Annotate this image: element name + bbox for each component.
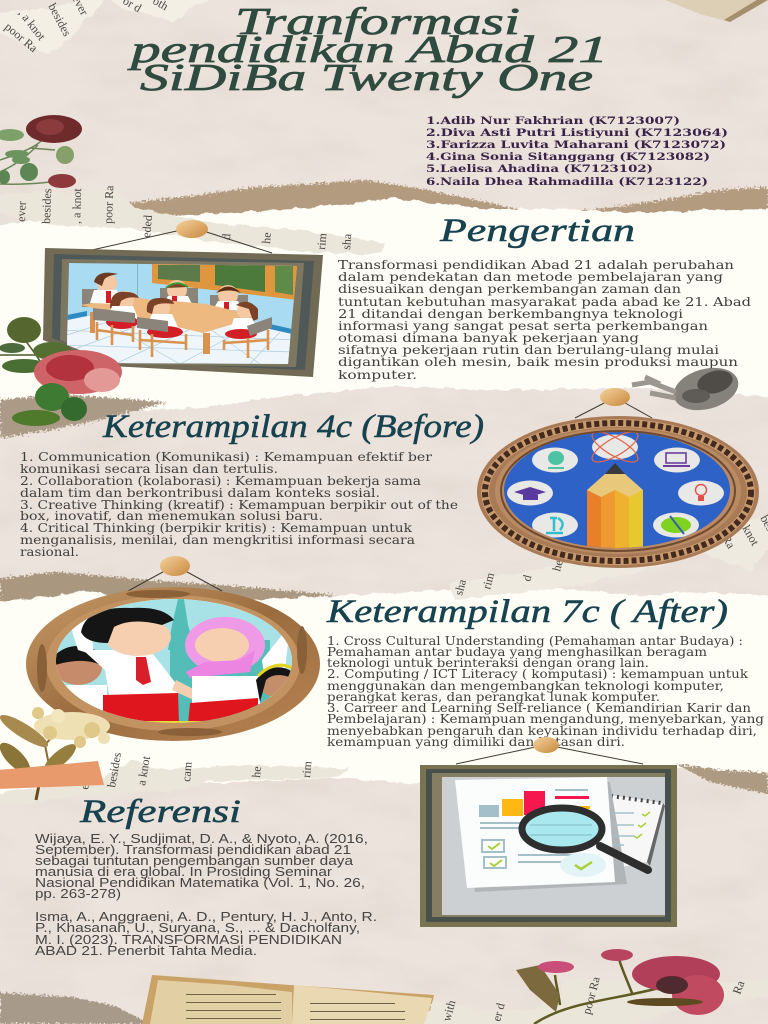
author list: 6.Naila Dhea Rahmadilla (K7123122) bbox=[426, 176, 708, 188]
heading: Keterampilan 4c: Keterampilan 4c (Before) bbox=[102, 409, 484, 445]
newspaper strip: upper: he bbox=[259, 232, 274, 244]
newspaper scrap: top left: besides bbox=[45, 1, 74, 39]
body text: Pengertian: Transformasi pendidikan Abad 21 adalah perubahan bbox=[338, 258, 734, 272]
author list: 3.Farizza Luvita Maharani (K7123072) bbox=[426, 139, 726, 151]
heading: Keterampilan 7c: Keterampilan 7c ( After) bbox=[326, 594, 728, 630]
icon: pink rose with leaves bbox=[0, 317, 122, 426]
newspaper strip: lower left: besides bbox=[104, 751, 124, 789]
body text: Keterampilan 4c: 1. Communication (Komunikasi) : Kemampuan efektif ber bbox=[20, 450, 432, 464]
body text: references bbox=[35, 832, 377, 958]
body text: Pengertian: digantikan oleh mesin, baik mesin produksi maupun bbox=[338, 355, 738, 369]
picture frame: checklist analysis bbox=[420, 765, 677, 927]
newspaper strip: right: Ra bbox=[719, 532, 739, 552]
newspaper scrap: top left: , a knot bbox=[16, 6, 49, 43]
icon: moth bbox=[632, 361, 743, 417]
body text: references: P., Khasanah, U., Suryana, S., ... & Dacholfany, bbox=[35, 921, 360, 935]
body text: references: September). Transformasi pendidikan abad 21 bbox=[35, 843, 351, 857]
body text: Pengertian: komputer. bbox=[338, 368, 417, 382]
newspaper strip: bottom right: with bbox=[439, 999, 458, 1023]
newspaper strip: right: he bbox=[549, 558, 566, 573]
book corner: top right bbox=[660, 0, 768, 22]
body text: Pengertian: disesuaikan dengan perkembangan zaman dan bbox=[338, 282, 681, 296]
heading: Pengertian: Pengertian bbox=[439, 213, 635, 249]
body text: Pengertian: otomasi dimana banyak pekerjaan yang bbox=[338, 331, 640, 345]
newspaper strip: upper: rim bbox=[314, 232, 329, 250]
newspaper strip: upper: d bbox=[219, 233, 234, 240]
body text: references: Nasional Pendidikan Matematika (Vol. 1, No. 26, bbox=[35, 876, 365, 890]
body text: Keterampilan 4c: dalam tim dan berkontribusi dalam konteks sosial. bbox=[20, 486, 380, 500]
icon: pressed pink flowers bbox=[516, 949, 724, 1024]
newspaper strip: lower left bbox=[0, 751, 350, 808]
icon: red rose branch top left bbox=[0, 115, 82, 188]
newspaper strip: upper bbox=[0, 185, 385, 255]
oval frame: education icons bbox=[477, 416, 759, 568]
hanging wires and pin: checklist frame bbox=[456, 737, 643, 764]
newspaper strip: right: rim bbox=[479, 570, 497, 591]
body text: Pengertian bbox=[338, 258, 752, 382]
heading: Referensi: Referensi bbox=[79, 794, 241, 830]
cream section: Pengertian bbox=[0, 198, 768, 412]
title: Tranformasi bbox=[235, 1, 520, 43]
illustration: schoolchildren bbox=[54, 599, 296, 725]
body text: references: Isma, A., Anggraeni, A. D., Pentury, H. J., Anto, R. bbox=[35, 910, 377, 924]
newspaper strip: upper: sha bbox=[339, 232, 354, 250]
body text: Keterampilan 4c: 3. Creative Thinking (kreatif) : Kemampuan berpikir out of the bbox=[20, 498, 458, 512]
newspaper strip: upper: besides bbox=[39, 188, 54, 224]
newspaper strip: upper: ever bbox=[14, 201, 29, 222]
newspaper strip: lower left: rim bbox=[299, 760, 314, 778]
body text: Keterampilan 7c: Pembelajaran) : Kemampuan mengandung, menyebarkan, yang bbox=[327, 712, 765, 726]
author list: 2.Diva Asti Putri Listiyuni (K7123064) bbox=[426, 127, 728, 139]
author list: 4.Gina Sonia Sitanggang (K7123082) bbox=[426, 151, 710, 163]
icon: dried flowers and tape bbox=[0, 707, 110, 800]
body text: Keterampilan 7c bbox=[327, 634, 765, 749]
newspaper strip: bottom right: er d bbox=[489, 1001, 508, 1023]
body text: Pengertian: dalam pendekatan dan metode pembelajaran yang bbox=[338, 270, 724, 284]
newspaper strip: bottom right: Ra bbox=[730, 978, 748, 996]
torn paper band: above 7c section bbox=[0, 572, 338, 604]
newspaper strip: right: d bbox=[519, 573, 534, 583]
newspaper strip: lower left: he bbox=[249, 766, 264, 778]
newspaper strip: lower left: cam bbox=[179, 760, 195, 782]
body text: references: Wijaya, E. Y., Sudjimat, D. A., & Nyoto, A. (2016, bbox=[35, 832, 368, 846]
body text: Keterampilan 4c: komunikasi secara lisan dan tertulis. bbox=[20, 462, 278, 476]
hanging wires and pin: children frame bbox=[128, 556, 222, 591]
body text: Keterampilan 7c: Pemahaman antar budaya yang menghasilkan beragam bbox=[327, 645, 707, 659]
oval frame: children bbox=[26, 587, 320, 741]
newspaper strip: right: knot bbox=[739, 522, 763, 549]
body text: Keterampilan 7c: perangkat keras, dan perangkat lunak komputer. bbox=[327, 690, 660, 704]
torn paper band: bottom left dark bbox=[0, 993, 150, 1024]
title: pendidikan Abad 21 bbox=[126, 29, 608, 71]
illustration: pencil and subject icons bbox=[507, 432, 724, 550]
body text: references: sebagai tuntutan pengembangan sumber daya bbox=[35, 854, 353, 868]
picture frame: classroom bbox=[43, 248, 323, 377]
newspaper strip: upper: eded bbox=[139, 214, 155, 238]
body text: references: manusia di era global. In Prosiding Seminar bbox=[35, 865, 332, 879]
torn paper band: right brown patch bbox=[676, 764, 768, 794]
body text: Keterampilan 4c bbox=[20, 450, 458, 559]
body text: Keterampilan 7c: menggunakan dan mengembangkan teknologi komputer, bbox=[327, 679, 724, 693]
newspaper strip: right bbox=[448, 512, 768, 600]
newspaper strip: lower left: a knot bbox=[134, 754, 153, 787]
body text: Pengertian: informasi yang sangat pesat serta perkembangan bbox=[338, 319, 708, 333]
torn paper band: brown patch left bbox=[0, 394, 167, 438]
body text: Pengertian: sifatnya pekerjaan rutin dan berulang-ulang mulai bbox=[338, 343, 719, 357]
newspaper strip: upper: , a knot bbox=[69, 187, 84, 224]
newspaper strip: upper: poor Ra bbox=[101, 185, 116, 224]
body text: Pengertian: tuntutan kebutuhan masyarakat pada abad ke 21. Abad bbox=[338, 295, 752, 309]
newspaper scrap: top left: poor Ra bbox=[2, 20, 41, 55]
author list: 5.Laelisa Ahadina (K7123102) bbox=[426, 163, 653, 175]
torn paper band: top brown edge bbox=[120, 180, 768, 216]
body text: Keterampilan 4c: 4. Critical Thinking (berpikir kritis) : Kemampuan untuk bbox=[20, 521, 413, 535]
author list bbox=[426, 115, 728, 188]
body text: Keterampilan 7c: 1. Cross Cultural Understanding (Pemahaman antar Budaya) : bbox=[327, 634, 743, 648]
title: SiDiBa Twenty One bbox=[140, 57, 593, 99]
body text: Keterampilan 4c: menganalisis, menilai, dan mengkritisi informasi secara bbox=[20, 533, 415, 547]
cream section: Keterampilan 7c bbox=[0, 587, 768, 800]
newspaper strip: right: sha bbox=[451, 577, 469, 597]
body text: Keterampilan 7c: menyebabkan pengaruh dan keyakinan individu terhadap diri, bbox=[327, 724, 757, 738]
body text: Keterampilan 7c: 2. Computing / ICT Literacy ( komputasi) : kemampuan untuk bbox=[327, 667, 749, 681]
hanging wires and pin: education frame bbox=[575, 388, 652, 418]
body text: references: M. I. (2023). TRANSFORMASI PENDIDIKAN bbox=[35, 933, 342, 947]
open book: bottom bbox=[142, 975, 434, 1024]
newspaper strip: bottom right bbox=[421, 974, 768, 1024]
newspaper scrap: top left bbox=[0, 0, 215, 55]
body text: Keterampilan 7c: teknologi untuk berinteraksi dengan orang lain. bbox=[327, 656, 649, 670]
title bbox=[126, 1, 608, 99]
body text: Pengertian: 21 ditandai dengan berkembangnya teknologi bbox=[338, 307, 683, 321]
body text: references: pp. 263-278) bbox=[35, 887, 121, 901]
body text: Keterampilan 7c: kemampuan yang dimiliki dan batasan diri. bbox=[327, 735, 625, 749]
newspaper strip: bottom right: poor Ra bbox=[579, 974, 603, 1016]
body text: Keterampilan 4c: rasional. bbox=[20, 545, 79, 559]
body text: Keterampilan 4c: 2. Collaboration (kolaborasi) : Kemampuan bekerja sama bbox=[20, 474, 421, 488]
body text: Keterampilan 4c: box, inovatif, dan menemukan solusi baru. bbox=[20, 509, 323, 523]
illustration: classroom group work bbox=[60, 260, 300, 366]
body text: Keterampilan 7c: 3. Carreer and Learning Self-reliance ( Kemandirian Karir dan bbox=[327, 701, 751, 715]
illustration: report and magnifier bbox=[442, 777, 665, 915]
newspaper strip: lower left: ever bbox=[77, 768, 95, 791]
author list: 1.Adib Nur Fakhrian (K7123007) bbox=[426, 115, 680, 127]
hanging wires and pin: classroom frame bbox=[92, 220, 272, 253]
body text: references: ABAD 21. Penerbit Tahta Media. bbox=[35, 944, 257, 958]
